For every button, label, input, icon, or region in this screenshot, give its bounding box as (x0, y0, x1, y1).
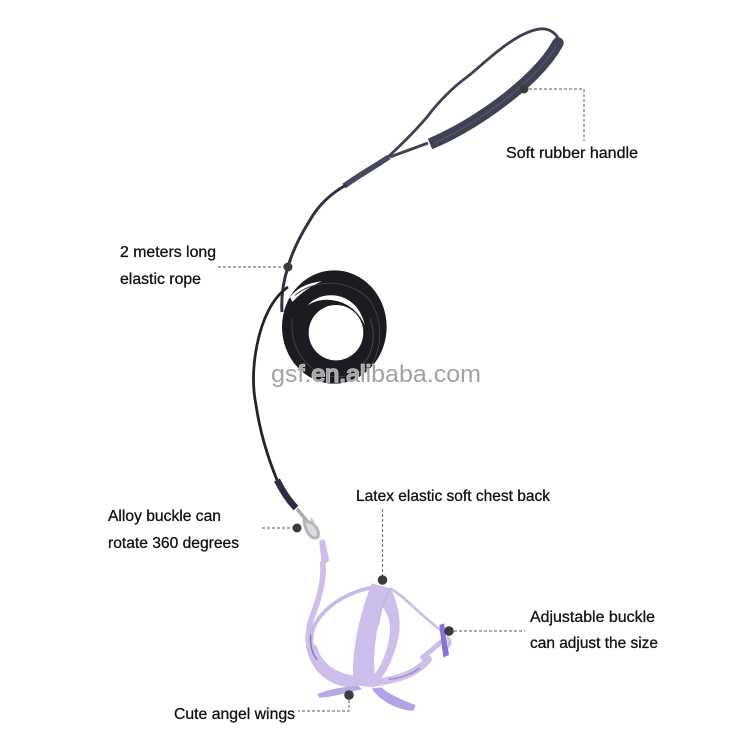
lower rope (253, 287, 288, 480)
buckle strap (423, 642, 442, 657)
upper right strap (391, 589, 440, 630)
lower strap left (313, 648, 355, 680)
coil of rope (282, 270, 387, 384)
rope junction sleeve (344, 157, 389, 186)
callout: elastic rope: 2 meters long (120, 244, 216, 261)
alloy swivel buckle (297, 509, 318, 538)
handle connector (390, 143, 428, 157)
callout: soft rubber handle: Soft rubber handle (506, 145, 638, 162)
elastic chest band (353, 583, 400, 687)
harness ring (312, 587, 373, 660)
angel wings (317, 686, 362, 698)
callout: elastic rope (120, 244, 292, 288)
band fold highlight (379, 589, 389, 625)
band inner opening (374, 607, 390, 674)
thin handle loop (388, 29, 558, 157)
leash strap to harness (308, 563, 355, 685)
rope leash with handle (253, 29, 564, 508)
upper rope (282, 185, 346, 312)
callout: alloy buckle: rotate 360 degrees (108, 535, 239, 552)
adjustable purple buckle (439, 623, 449, 657)
callout: alloy buckle: Alloy buckle can (108, 508, 221, 525)
rubber handle (430, 37, 564, 144)
lower strap right (375, 659, 428, 683)
callout: soft rubber handle (506, 84, 638, 162)
watermark: gsf.en.alibaba.com (271, 361, 481, 388)
callout: alloy buckle (108, 508, 302, 552)
rope end sleeve (277, 480, 296, 508)
callout: latex chest back: Latex elastic soft chest back (356, 488, 551, 505)
strap tab (319, 539, 329, 564)
callout: adjustable buckle: Adjustable buckle (530, 609, 655, 626)
callout: adjustable buckle (444, 609, 658, 652)
callout: latex chest back (356, 488, 551, 585)
strap shadow (311, 635, 317, 659)
callout: angel wings (174, 690, 354, 723)
callout: adjustable buckle: can adjust the size (530, 635, 658, 652)
callout: elastic rope: elastic rope (120, 271, 201, 288)
callout: angel wings: Cute angel wings (174, 706, 295, 723)
harness (308, 539, 451, 711)
